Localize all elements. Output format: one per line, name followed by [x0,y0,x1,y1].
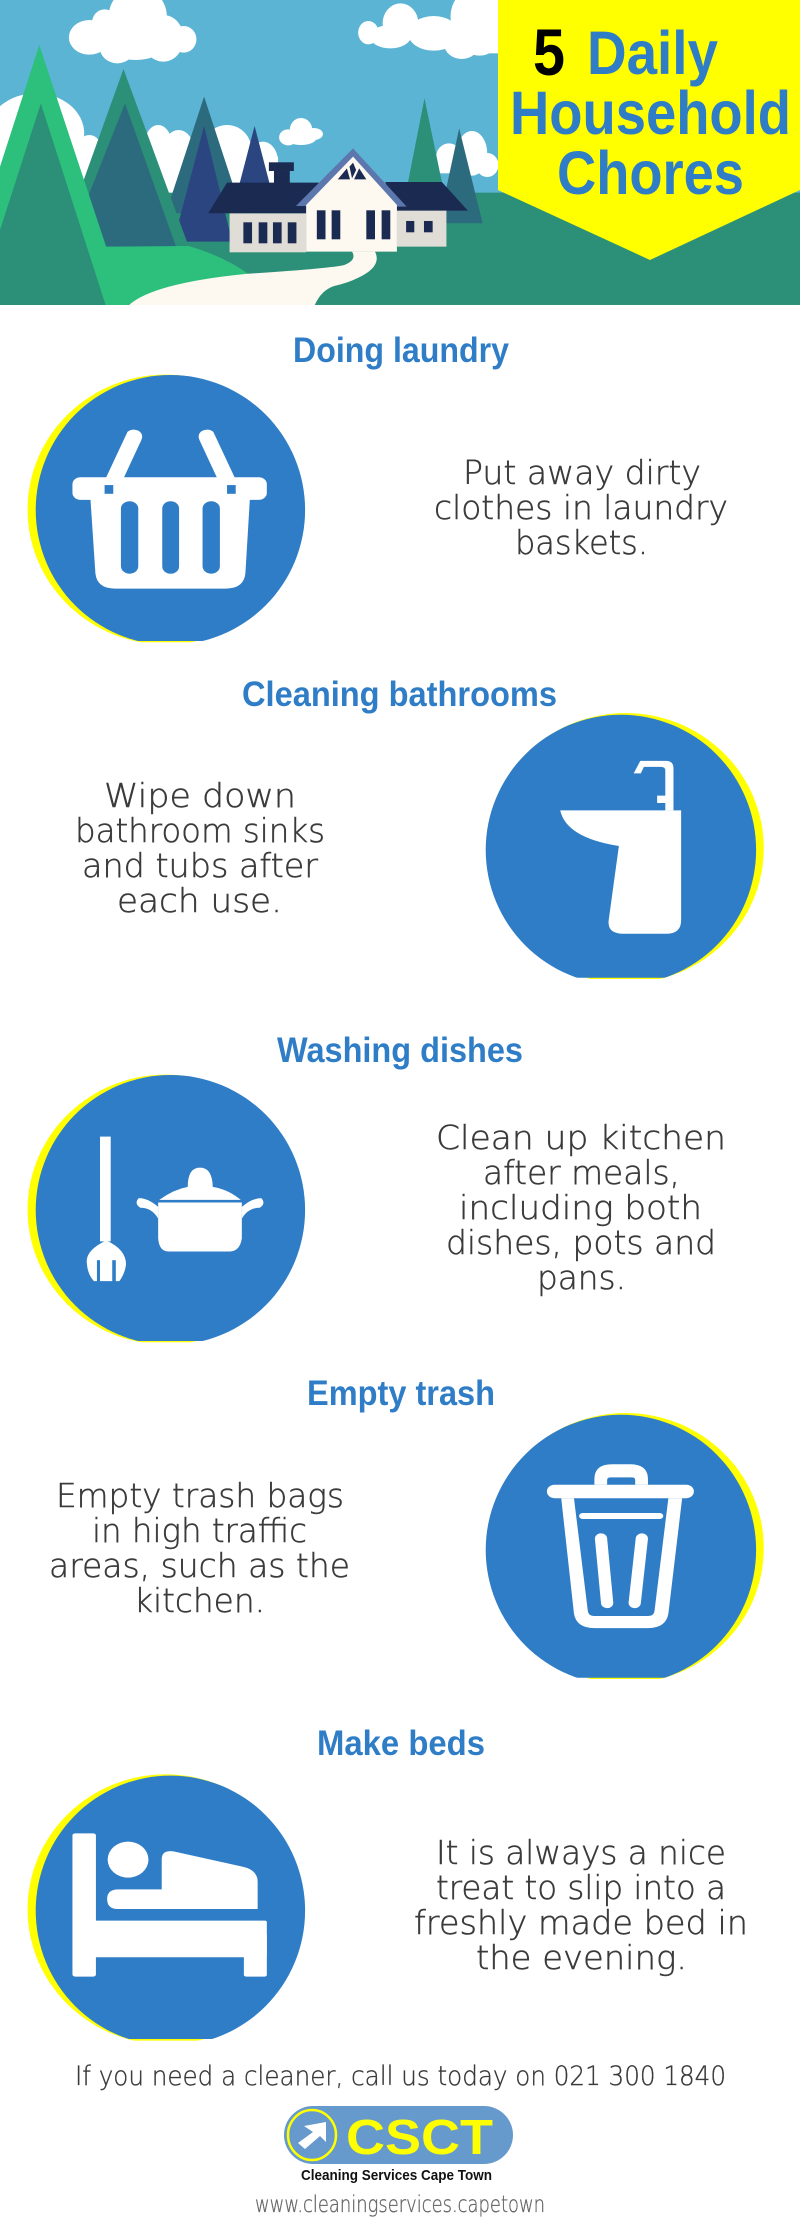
text: dishes description: after meals, [483,1153,680,1192]
icon: bed in circle [28,1774,305,2046]
text: beds description: It is always a nice [436,1833,726,1872]
heading: Washing dishes: Washing dishes [277,1031,523,1070]
text: beds description: freshly made bed in [414,1903,748,1942]
website url: www.cleaningservices.capetown [255,2192,545,2218]
text: bathroom description: bathroom sinks [75,811,325,850]
icon: bathroom sink in circle [486,713,764,985]
text: laundry description: Put away dirty [463,453,701,492]
icon: trash can in circle [486,1413,764,1685]
text: beds description [414,1833,748,1977]
logo: CSCT: CSCT [346,2111,493,2165]
text: trash description: in high traffic [92,1511,307,1550]
call to action: If you need a cleaner, call us today on 021 300 1840 [75,2061,726,2092]
text: trash description [49,1476,350,1620]
icon: laundry basket in circle [28,375,305,645]
logo: CSCT: Cleaning Services Cape Town [301,2167,492,2184]
text: dishes description: including both [459,1188,702,1227]
header illustration: house and trees landscape [0,0,800,305]
heading: Doing laundry: Doing laundry [293,331,509,370]
heading: Cleaning bathrooms: Cleaning bathrooms [242,675,557,714]
text: dishes description: pans. [537,1258,626,1297]
text: trash description: Empty trash bags [56,1476,344,1515]
logo: CSCT [284,2106,513,2184]
heading: Make beds: Make beds [317,1724,485,1763]
title banner: Daily [587,19,718,87]
text: laundry description [434,453,728,562]
text: bathroom description [75,776,325,920]
text: trash description: areas, such as the [49,1546,350,1585]
text: bathroom description: each use. [117,881,282,920]
title banner [498,0,800,260]
text: laundry description: baskets. [515,523,648,562]
text: beds description: the evening. [476,1938,687,1977]
text: dishes description: Clean up kitchen [436,1118,726,1157]
icon: pot and utensil in circle [28,1075,305,1345]
text: trash description: kitchen. [134,1581,265,1620]
text: dishes description: dishes, pots and [446,1223,716,1262]
text: bathroom description: Wipe down [104,776,296,815]
heading: Empty trash: Empty trash [307,1374,495,1413]
text: bathroom description: and tubs after [82,846,318,885]
title banner: 5 [533,15,565,89]
text: laundry description: clothes in laundry [434,488,728,527]
text: beds description: treat to slip into a [436,1868,726,1907]
title banner: Chores [557,139,744,207]
text: dishes description [436,1118,726,1297]
